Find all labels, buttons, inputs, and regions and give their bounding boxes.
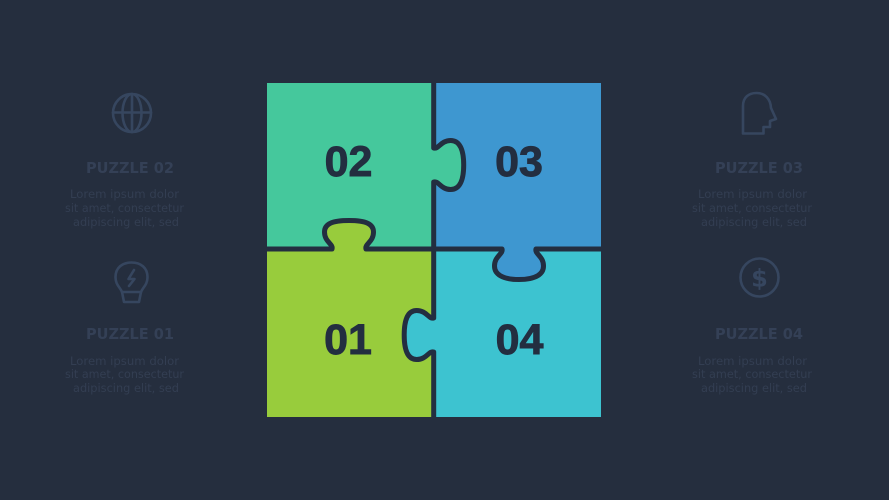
icon: dollar coin: $ bbox=[751, 264, 768, 292]
text block: puzzle 04 body: adipiscing elit, sed bbox=[701, 381, 807, 395]
text block: puzzle 03 body bbox=[692, 187, 812, 229]
text block: puzzle 02 body: Lorem ipsum dolor bbox=[70, 187, 179, 201]
puzzle piece 02 bbox=[267, 83, 434, 250]
text block: puzzle 03 body: adipiscing elit, sed bbox=[701, 215, 807, 229]
puzzle piece 03 bbox=[434, 83, 601, 250]
number 02: 02 bbox=[325, 138, 372, 186]
text block: puzzle 04 body bbox=[692, 354, 812, 395]
text block: puzzle 02 body: adipiscing elit, sed bbox=[73, 215, 179, 229]
heading: puzzle 02: PUZZLE 02 bbox=[86, 159, 174, 177]
panel: puzzle 02 description bbox=[65, 94, 184, 229]
text block: puzzle 01 body bbox=[65, 354, 184, 395]
icon: globe bbox=[113, 94, 151, 132]
text block: puzzle 03 body: Lorem ipsum dolor bbox=[698, 187, 807, 201]
text block: puzzle 02 body: sit amet, consectetur bbox=[65, 201, 184, 215]
text block: puzzle 02 body bbox=[65, 187, 184, 229]
panel: puzzle 03 description bbox=[692, 93, 812, 229]
panel: puzzle grid bbox=[267, 83, 601, 417]
number 03: 03 bbox=[495, 138, 543, 186]
heading: puzzle 03: PUZZLE 03 bbox=[715, 159, 803, 177]
panel: puzzle 04 description bbox=[692, 258, 812, 395]
puzzle piece 04 bbox=[434, 250, 601, 417]
icon: light bulb bbox=[116, 262, 148, 302]
puzzle piece 01 bbox=[267, 250, 434, 417]
text block: puzzle 03 body: sit amet, consectetur bbox=[692, 201, 812, 215]
knob: piece 01 into 02 bbox=[324, 220, 374, 253]
knob: piece 02 into 03 bbox=[430, 140, 464, 190]
knob: piece 04 into 01 bbox=[404, 310, 438, 360]
text block: puzzle 04 body: sit amet, consectetur bbox=[692, 367, 812, 381]
text block: puzzle 01 body: adipiscing elit, sed bbox=[73, 381, 179, 395]
knob: piece 03 into 04 bbox=[494, 245, 544, 280]
heading: puzzle 01: PUZZLE 01 bbox=[86, 325, 174, 343]
divider outline: vertical seam bbox=[404, 83, 464, 417]
text block: puzzle 04 body: Lorem ipsum dolor bbox=[698, 354, 807, 368]
icon: head profile bbox=[743, 93, 776, 134]
number 01: 01 bbox=[324, 316, 372, 364]
number 04: 04 bbox=[496, 316, 543, 364]
divider outline: horizontal seam bbox=[267, 220, 601, 280]
text block: puzzle 01 body: sit amet, consectetur bbox=[65, 367, 184, 381]
text block: puzzle 01 body: Lorem ipsum dolor bbox=[70, 354, 179, 368]
panel: puzzle 01 description bbox=[65, 262, 184, 395]
heading: puzzle 04: PUZZLE 04 bbox=[715, 325, 803, 343]
